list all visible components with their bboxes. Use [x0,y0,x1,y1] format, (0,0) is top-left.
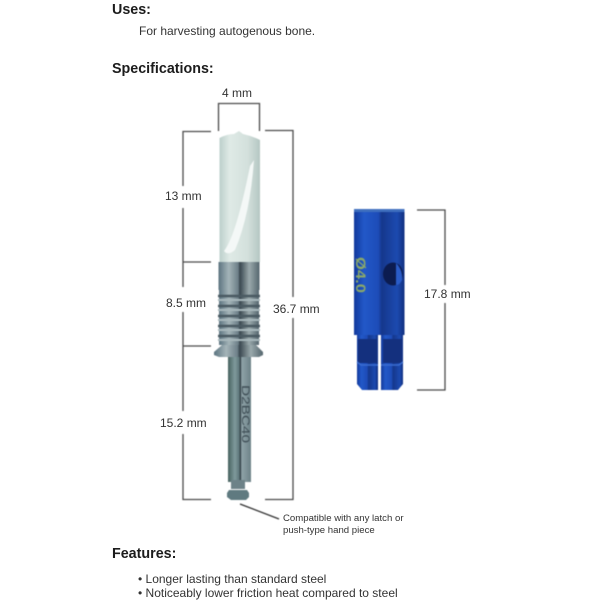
label: 15.2 mm: 15.2 mm [160,416,207,430]
text: uses description: For harvesting autogenous bone. [139,24,315,38]
callout leader [240,504,279,519]
latch end [227,490,249,500]
flute highlight [224,160,254,253]
heading: uses: Uses: [112,2,151,18]
white ceramic tip [220,131,260,262]
sleeve body [354,210,404,335]
shaft [228,357,251,482]
label: 8.5 mm: 8.5 mm [166,296,206,310]
label: 13 mm: 13 mm [165,189,202,203]
callout: compatibility note: push-type hand piece [283,525,375,536]
dimension brackets [183,104,445,519]
callout: compatibility note [283,513,404,536]
drill bit [214,131,263,500]
callout: compatibility note: Compatible with any latch or [283,513,404,524]
grooved grip [219,290,259,345]
size marking: Ø4.0 [353,257,369,293]
4 mm bracket [218,104,260,131]
latch notch [231,480,245,489]
sleeve bracket [417,210,445,390]
steel neck [218,262,260,290]
list: features: • Longer lasting than standard steel [138,572,326,586]
sleeve [353,209,404,390]
list: features: • Noticeably lower friction heat compared to steel [138,586,398,600]
heading: specifications: Specifications: [112,61,214,77]
heading: features: Features: [112,546,176,562]
label: 36.7 mm: 36.7 mm [273,302,320,316]
list: features [138,572,398,600]
label: 17.8 mm: 17.8 mm [424,287,471,301]
side hole [383,262,403,286]
label: 4 mm: 4 mm [222,86,252,100]
shaft marking: D2BC40 [239,385,251,443]
collar flange [214,345,263,357]
right bracket [265,130,293,500]
sleeve prongs [357,335,378,390]
left brackets [183,132,211,500]
